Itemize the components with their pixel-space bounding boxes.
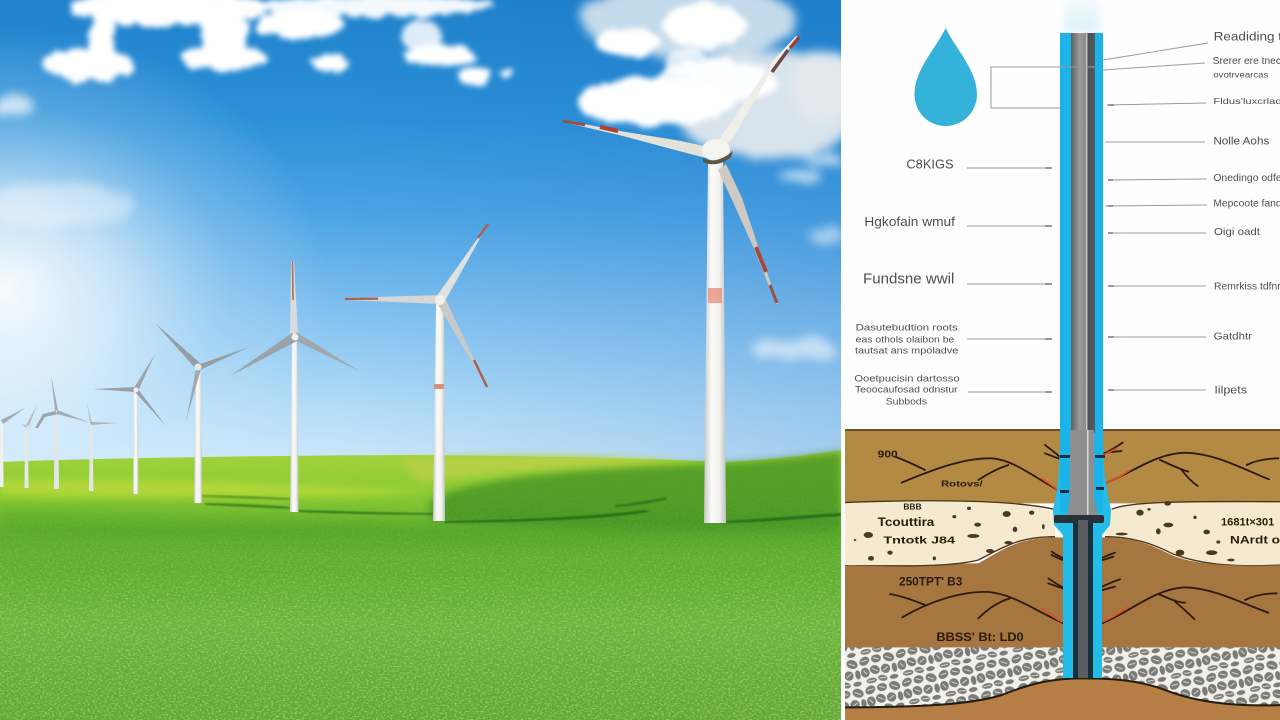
right labels: Mepcoote fand [1213, 199, 1280, 210]
stratum labels: BBB [903, 502, 922, 511]
lower casing [1063, 523, 1102, 678]
right labels: Readiding t [1214, 30, 1280, 44]
turbine 4 [155, 323, 249, 503]
left labels: Fundsne wwil [863, 271, 954, 287]
stratum labels: Tcouttira [878, 515, 935, 529]
white background [843, 0, 1280, 720]
right labels: Nolle Aohs [1213, 136, 1269, 148]
turbine 3 [230, 262, 359, 512]
fracture highlights [1042, 448, 1130, 622]
far turbine cluster [0, 375, 117, 491]
diagram labels [854, 30, 1280, 407]
outer blue casing upper [1060, 33, 1103, 513]
fracture lines [890, 443, 1278, 628]
ground strata [842, 430, 1280, 720]
sky [0, 0, 841, 470]
left labels: eas othols olaibon be [856, 334, 954, 344]
left labels: C8KIGS [906, 157, 954, 172]
right labels: Remrkiss tdfnr [1214, 281, 1280, 292]
lower production tube [1078, 520, 1088, 678]
stratum labels: 1681t×301 [1221, 516, 1274, 528]
turbine 5 [93, 354, 166, 494]
grass field [0, 450, 841, 720]
stratum labels: NArdt o [1230, 534, 1280, 546]
left labels: Ooetpucisin dartosso [854, 374, 960, 384]
leader lines [967, 43, 1208, 392]
faded wellhead top [1064, 0, 1100, 33]
turbine 1 large [563, 36, 799, 523]
stratum labels: Tntotk J84 [883, 535, 956, 546]
clouds [0, 0, 860, 361]
stratum labels: BBSS' Bt: LD0 [936, 630, 1024, 644]
right labels: ovotrvearcas [1213, 69, 1269, 79]
well pipe [1053, 0, 1111, 678]
left labels: Subbods [886, 397, 928, 407]
brown mound fills [845, 537, 1280, 567]
turbine shadows [200, 495, 841, 523]
layer: gravel [842, 647, 1280, 707]
left labels: Hgkofain wmuf [864, 214, 955, 229]
turbine 2 [345, 224, 488, 521]
right labels: Srerer ere tnec [1213, 56, 1280, 67]
blue wellbore bulge [1053, 440, 1111, 535]
stratum labels: 250TPT' B3 [899, 574, 963, 588]
left labels [854, 157, 960, 407]
packer flange [1054, 515, 1104, 523]
left labels: Dasutebudtion roots [856, 323, 958, 333]
panel: wind farm landscape [0, 0, 860, 720]
layer: speckled cream sand [842, 501, 1280, 566]
stratum labels: Rotovs/ [941, 479, 983, 489]
right labels: Gatdhtr [1214, 331, 1253, 342]
right labels: Fldus'luxcrlad [1213, 96, 1280, 106]
stratum labels [878, 449, 1280, 644]
right labels [1213, 30, 1280, 396]
stratum labels: 900 [878, 449, 898, 460]
layer: lower brown sediment [906, 563, 1215, 567]
right labels: Onedingo odfe [1213, 173, 1280, 184]
layer: upper sediment [842, 430, 1280, 503]
right labels: Iilpets [1214, 384, 1248, 396]
panel: well cross-section diagram [842, 0, 1280, 720]
inner grey tubing [1071, 33, 1095, 433]
layer: base sediment [842, 678, 1280, 720]
left labels: tautsat ans mpoladve [855, 346, 958, 356]
right labels: Oigi oadt [1214, 227, 1260, 238]
water drop icon [914, 28, 977, 126]
left labels: Teoocaufosad odnstur [855, 385, 958, 395]
casing damage marks [1060, 455, 1105, 493]
